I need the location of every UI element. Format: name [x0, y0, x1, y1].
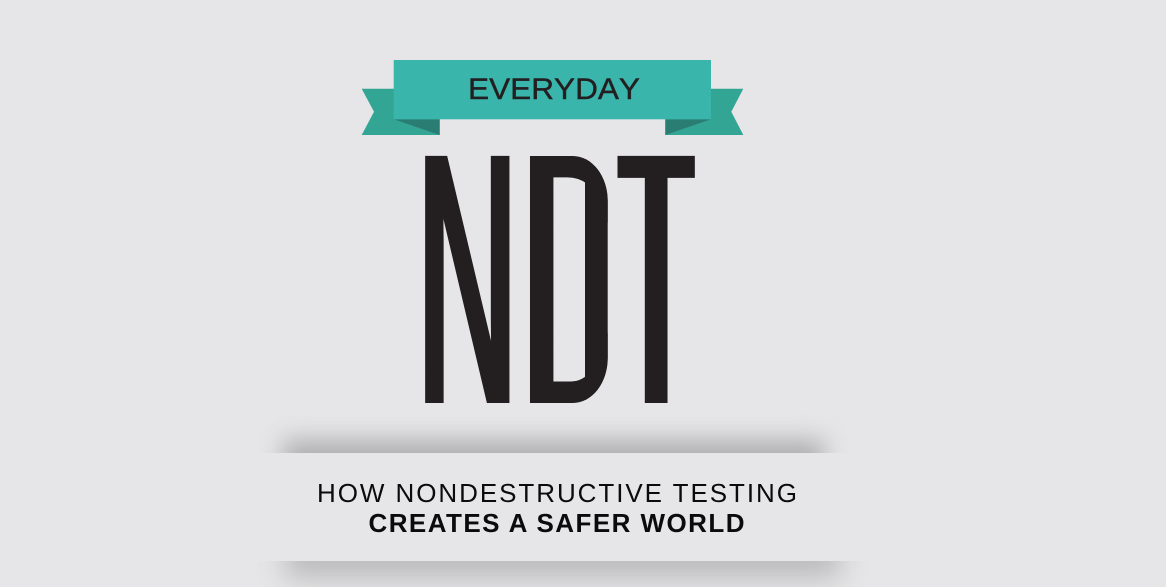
letter T: T — [621, 73, 691, 484]
shadow above subtitle band — [283, 440, 824, 490]
main title NDT — [425, 156, 695, 403]
subtitle band — [0, 453, 1166, 561]
infographic cover — [271, 60, 852, 587]
ribbon left fold — [394, 119, 440, 135]
letter N: N — [417, 72, 517, 484]
subtitle line 1: HOW NONDESTRUCTIVE TESTING — [317, 478, 797, 508]
subtitle line 2: CREATES A SAFER WORLD — [368, 508, 744, 538]
ribbon right fold — [665, 119, 711, 135]
ribbon banner — [362, 60, 743, 135]
letter D: D — [520, 75, 640, 485]
letter D — [530, 156, 608, 403]
ribbon label: EVERYDAY — [468, 73, 640, 106]
ribbon right tail — [665, 89, 743, 135]
ribbon left tail — [362, 89, 440, 135]
ribbon main band — [394, 60, 711, 119]
shadow below subtitle band — [285, 530, 840, 578]
